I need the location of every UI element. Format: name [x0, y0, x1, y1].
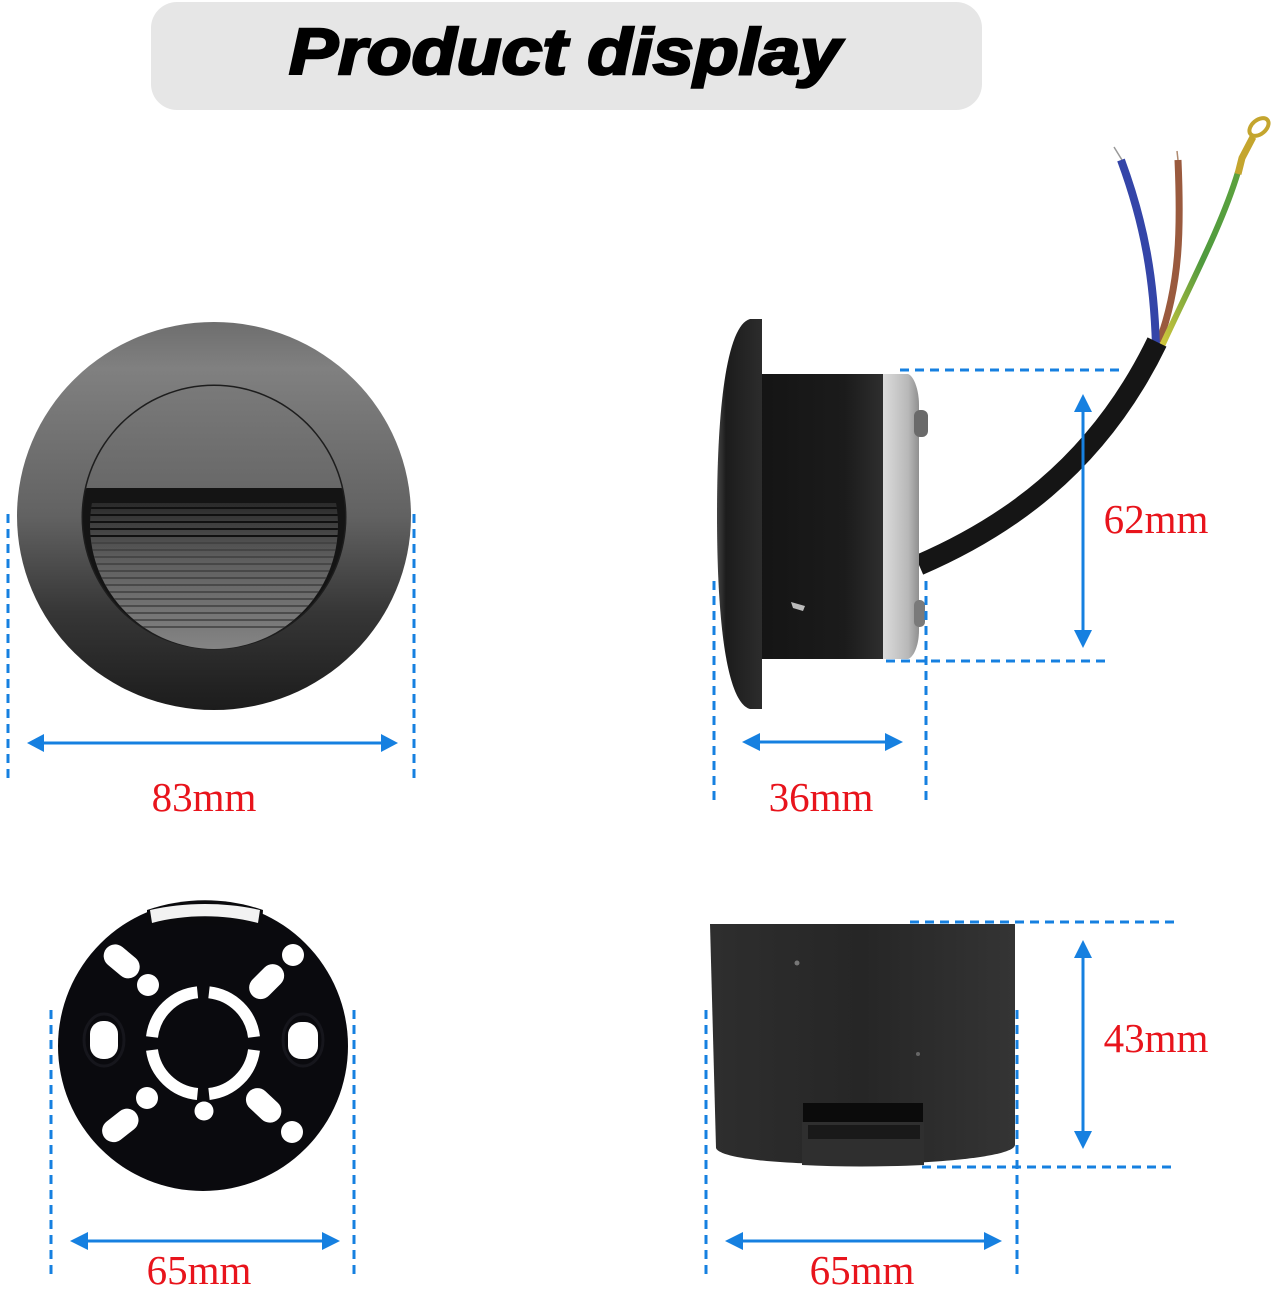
dimension: 36mm: 36mm: [769, 774, 873, 820]
dimension: 83mm: 83mm: [152, 774, 256, 820]
dimension: 62mm: 62mm: [1104, 496, 1208, 542]
dimension: 65mm can: [706, 1010, 1017, 1290]
title: Product display: [289, 15, 844, 88]
dimension: 83mm: [8, 514, 414, 820]
dimension: 65mm back plate: [51, 1010, 354, 1290]
product photo: front view of round light: [17, 322, 411, 710]
dimension: 62mm: [886, 370, 1208, 661]
dimension: 43mm: 43mm: [1104, 1015, 1208, 1061]
title: [151, 2, 982, 110]
dimension: 43mm: [910, 922, 1208, 1167]
product photo: mounting can: [710, 924, 1015, 1166]
product photo: side view with wires: [717, 115, 1272, 709]
dimension: 36mm: [714, 581, 926, 820]
product photo: back plate: [58, 900, 348, 1191]
